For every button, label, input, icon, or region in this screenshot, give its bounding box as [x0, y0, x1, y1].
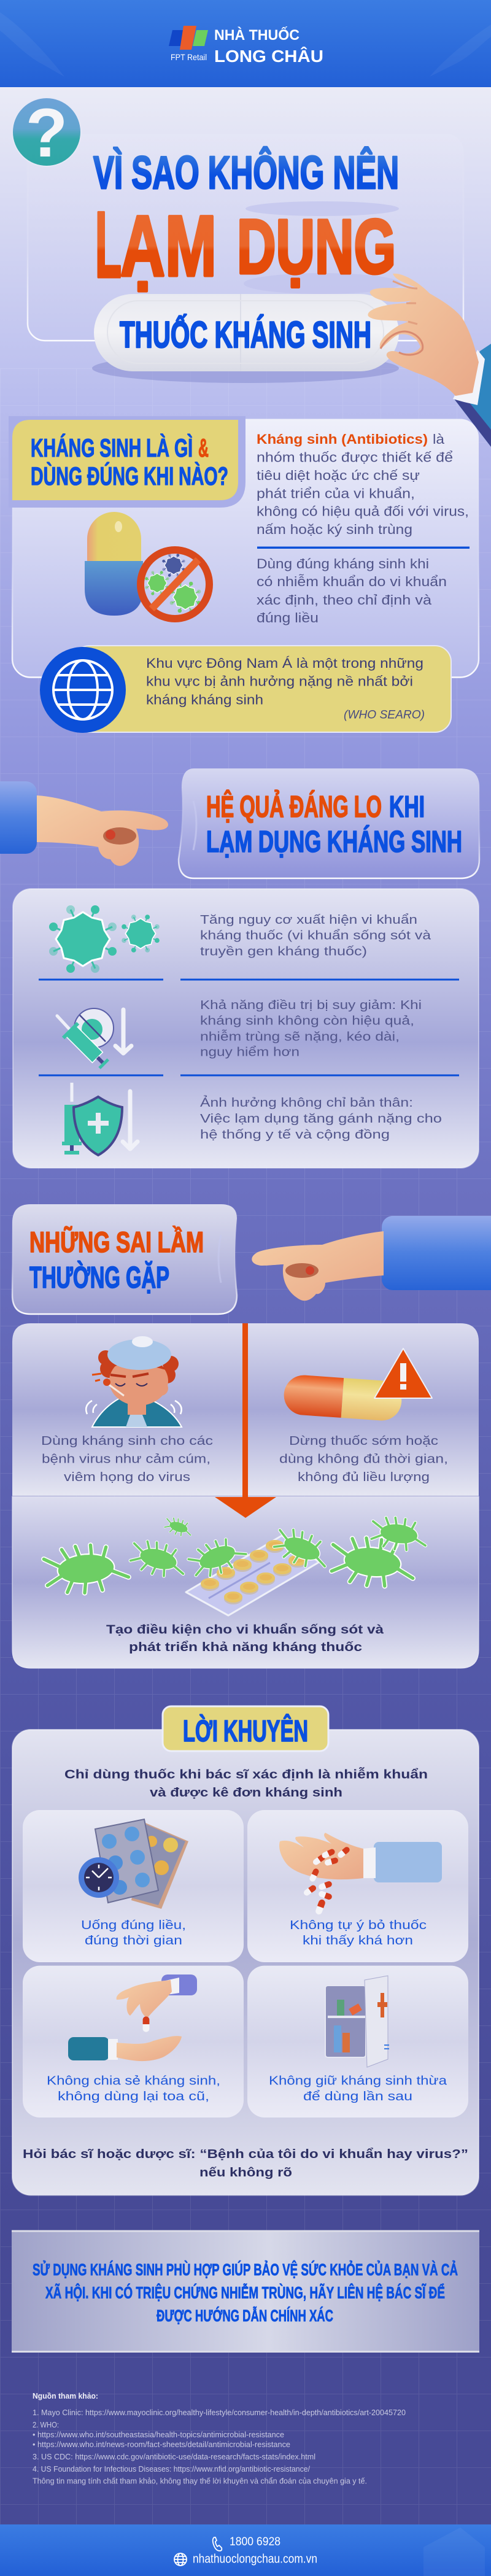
definition text: phát triển của vi khuẩn,: [257, 486, 415, 501]
title panel: [12, 95, 491, 447]
usage text: đúng liều: [257, 610, 319, 625]
heading tab: DÙNG ĐÚNG KHI NÀO?: [31, 461, 228, 490]
heading line: Lạm dụng: ẠM: [120, 198, 217, 294]
references: • https://www.who.int/southeastasia/health-topics/antimicrobial-resistance: [33, 2430, 284, 2439]
consequence text 3: Việc lạm dụng tăng gánh nặng cho: [200, 1112, 442, 1126]
definition text: nấm hoặc ký sinh trùng: [257, 522, 412, 537]
icon: syringe and virus down arrow: [57, 1008, 131, 1072]
consequence text 2: nguy hiểm hơn: [200, 1046, 300, 1059]
illustration: pointing hand right: [0, 781, 168, 866]
logo: FPT Retail mark: FPT Retail: [171, 52, 207, 62]
icon: phone: [213, 2537, 222, 2551]
card text: Không giữ kháng sinh thừa: [269, 2075, 447, 2088]
consequence text 3: [200, 1096, 442, 1142]
references: 4. US Foundation for Infectious Diseases: https://www.nfid.org/antibiotic-resistance/: [33, 2464, 310, 2474]
definition text: [257, 431, 469, 537]
pill with label: THUỐC KHÁNG SINH: [120, 314, 371, 355]
consequence text 3: hệ thống y tế và cộng đồng: [200, 1128, 390, 1142]
heading line: Lạm dụng: L: [95, 193, 122, 297]
illustration: pointing hand left: [252, 1216, 491, 1301]
footer band: [0, 2524, 491, 2576]
consequence text 1: kháng thuốc (vi khuẩn sống sót và: [200, 929, 431, 943]
icon: website globe: [174, 2553, 187, 2566]
icon: question mark: [12, 95, 81, 171]
icon: hand dropping pills: [279, 1833, 442, 1916]
heading line: Lạm dụng: DỤNG: [237, 204, 396, 290]
mistake text 2: [279, 1434, 448, 1484]
card: do not stop: [247, 1810, 468, 1962]
callout: WHO SEARO: khu vực bị ảnh hưởng nặng nề nhất bởi: [146, 674, 413, 689]
result text: [106, 1623, 384, 1654]
closing message panel: ĐƯỢC HƯỚNG DẪN CHÍNH XÁC: [157, 2306, 333, 2325]
consequence text 1: truyền gen kháng thuốc): [200, 945, 367, 959]
heading tab: KHÁNG SINH LÀ GÌ: [31, 433, 193, 462]
usage text: Dùng đúng kháng sinh khi: [257, 556, 429, 571]
consequence text 1: [200, 913, 431, 959]
heading tab: advice: [163, 1706, 328, 1751]
icon: medicine cabinet: [325, 1976, 389, 2067]
mistake text 1: Dùng kháng sinh cho các: [41, 1434, 213, 1448]
references: • https://www.who.int/news-room/fact-sheets/detail/antimicrobial-resistance: [33, 2440, 290, 2449]
result text: Tạo điều kiện cho vi khuẩn sống sót và: [106, 1623, 384, 1636]
icon: resistant bacteria: [49, 905, 160, 973]
icon: hands passing pill: [68, 1975, 197, 2061]
icon: blister packs and clock: [79, 1819, 188, 1909]
card: do not share: [23, 1966, 244, 2118]
references: 1. Mayo Clinic: https://www.mayoclinic.org/healthy-lifestyle/consumer-health/in-depth/antibiotics/art-20045720: [33, 2408, 406, 2417]
card text: để dùng lần sau: [303, 2090, 412, 2103]
references: Nguồn tham khảo:: [33, 2391, 98, 2400]
brand name: NHÀ THUỐC: [214, 26, 300, 44]
header band: [0, 0, 491, 87]
card text: [269, 2075, 447, 2103]
card text: Không tự ý bỏ thuốc: [290, 1919, 427, 1932]
panel: advice: [12, 1706, 479, 2195]
panel: what are antibiotics: [9, 416, 479, 733]
illustration: sick child: [86, 1336, 182, 1427]
heading card: common mistakes: THƯỜNG GẶP: [29, 1261, 169, 1294]
definition text: là: [433, 431, 445, 447]
mistake text 1: viêm họng do virus: [64, 1471, 190, 1484]
card text: Không chia sẻ kháng sinh,: [47, 2075, 220, 2088]
heading tab: &: [198, 433, 209, 462]
mistake text 2: dùng không đủ thời gian,: [279, 1452, 448, 1466]
icon: globe: [40, 647, 126, 733]
consequence text 1: Tăng nguy cơ xuất hiện vi khuẩn: [200, 913, 417, 927]
phone number: 1800 6928: [230, 2535, 280, 2548]
card text: không dùng lại toa cũ,: [58, 2090, 209, 2103]
advice footer question: nếu không rõ: [199, 2166, 292, 2180]
icon: syringe and shield: [62, 1083, 137, 1155]
icon: question mark: ?: [26, 95, 68, 171]
advice footer question: Hỏi bác sĩ hoặc dược sĩ: “Bệnh của tôi do vi khuẩn hay virus?”: [23, 2148, 468, 2161]
definition text: Kháng sinh (Antibiotics): [257, 431, 428, 447]
mistake text 2: không đủ liều lượng: [298, 1471, 430, 1484]
advice intro: Chỉ dùng thuốc khi bác sĩ xác định là nhiễm khuẩn: [64, 1766, 428, 1781]
result text: phát triển khả năng kháng thuốc: [129, 1641, 362, 1654]
mistake text 1: [41, 1434, 213, 1484]
definition text: nhóm thuốc được thiết kế để: [257, 450, 453, 465]
callout: WHO SEARO: Khu vực Đông Nam Á là một trong những: [146, 656, 423, 671]
advice intro: và được kê đơn kháng sinh: [150, 1786, 342, 1800]
illustration: hand holding pill: [368, 274, 491, 447]
definition text: không có hiệu quả đối với virus,: [257, 504, 469, 519]
website address: nhathuoclongchau.com.vn: [193, 2553, 317, 2566]
heading card: consequences: HỆ QUẢ ĐÁNG LO: [206, 790, 382, 824]
heading tab: [12, 420, 238, 500]
callout: WHO SEARO: (WHO SEARO): [344, 708, 425, 722]
pill with label: [92, 294, 399, 383]
card text: Uống đúng liều,: [81, 1919, 186, 1932]
heading card: common mistakes: [12, 1204, 237, 1314]
mistake text 1: bệnh virus như cảm cúm,: [42, 1452, 211, 1466]
heading tab: advice: LỜI KHUYÊN: [183, 1714, 308, 1748]
heading card: common mistakes: NHỮNG SAI LẦM: [29, 1226, 204, 1258]
mistake text 2: Dừng thuốc sớm hoặc: [289, 1434, 438, 1448]
icon: capsule and no-bacteria sign: [85, 512, 209, 619]
logo: FPT Retail mark: [169, 26, 208, 62]
card text: đúng thời gian: [85, 1934, 182, 1947]
card: do not keep: [247, 1966, 468, 2118]
brand name: LONG CHÂU: [214, 47, 323, 66]
usage text: [257, 556, 447, 625]
usage text: xác định, theo chỉ định và: [257, 592, 432, 608]
advice intro: [64, 1766, 428, 1800]
consequence text 2: Khả năng điều trị bị suy giảm: Khi: [200, 999, 422, 1012]
illustration: capsule with warning: [282, 1348, 432, 1422]
card text: khi thấy khá hơn: [303, 1934, 413, 1947]
card: correct dose: [23, 1810, 244, 1962]
consequence text 3: Ảnh hưởng không chỉ bản thân:: [200, 1096, 413, 1110]
arrow: leads to: [215, 1323, 276, 1518]
panel: mistakes: [12, 1323, 479, 1668]
advice footer question: [23, 2148, 468, 2180]
card text: [47, 2075, 220, 2103]
closing message panel: [12, 2230, 479, 2353]
brand name: [214, 26, 323, 66]
card text: [81, 1919, 186, 1947]
panel: consequences list: [13, 889, 479, 1168]
references: 2. WHO:: [33, 2420, 59, 2429]
consequence text 2: [200, 999, 422, 1059]
callout: WHO SEARO: [40, 646, 451, 733]
heading card: consequences: [179, 768, 479, 878]
references: 3. US CDC: https://www.cdc.gov/antibiotic-use/data-research/facts-stats/index.html: [33, 2452, 315, 2461]
illustration: bacteria and blister pack: [43, 1515, 428, 1615]
heading card: consequences: KHI: [389, 791, 425, 824]
definition text: tiêu diệt hoặc ức chế sự: [257, 468, 420, 483]
usage text: có nhiễm khuẩn do vi khuẩn: [257, 574, 447, 589]
card text: [290, 1919, 427, 1947]
references: Thông tin mang tính chất tham khảo, không thay thế lời khuyên và chẩn đoán của chuyên gia y tế.: [33, 2477, 367, 2486]
consequence text 2: kháng sinh không còn hiệu quả,: [200, 1014, 414, 1027]
heading line: Lạm dụng: [95, 193, 396, 297]
references: [33, 2391, 406, 2486]
consequence text 2: nhiễm trùng sẽ nặng, kéo dài,: [200, 1030, 400, 1044]
callout: WHO SEARO: kháng kháng sinh: [146, 692, 263, 707]
